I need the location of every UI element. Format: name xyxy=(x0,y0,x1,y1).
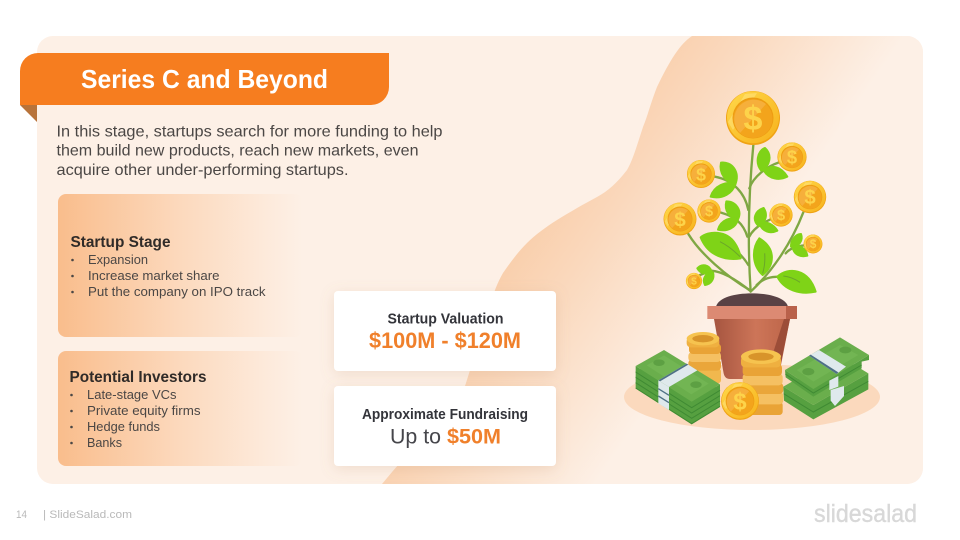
card: startup valuation xyxy=(334,291,556,371)
footer: brand logo: slidesalad xyxy=(814,500,917,528)
heading: potential investors: Potential Investors xyxy=(70,369,207,386)
left coin stack xyxy=(687,332,721,383)
pot rim xyxy=(707,306,797,319)
ground shadow xyxy=(624,364,880,430)
label: startup valuation: Startup Valuation xyxy=(388,312,504,328)
value: fundraising amount: Up to xyxy=(390,424,441,448)
intro paragraph: them build new products, reach new markets, even xyxy=(56,142,418,160)
footer: page number and site: | SlideSalad.com xyxy=(43,509,132,521)
list: potential investors: Private equity firms xyxy=(87,404,200,418)
coins on plant: $ xyxy=(787,146,797,167)
coins on plant: $ xyxy=(810,237,817,251)
title: Series C and Beyond xyxy=(81,64,328,94)
list: startup stage xyxy=(71,253,266,299)
pot, money and coin stacks xyxy=(636,293,869,424)
background blob xyxy=(382,36,923,484)
soil xyxy=(716,293,788,307)
label: approximate fundraising: Approximate Fundraising xyxy=(362,407,528,423)
title ribbon xyxy=(20,53,389,122)
front coin xyxy=(721,382,759,420)
footer: page number and site: 14 xyxy=(16,509,27,521)
list: potential investors xyxy=(70,388,200,450)
coins on plant: $ xyxy=(674,208,686,231)
left money stack xyxy=(636,350,720,424)
ribbon fold xyxy=(20,105,37,122)
right money stack xyxy=(783,337,869,419)
list: startup stage: Put the company on IPO track xyxy=(88,285,266,299)
intro paragraph: In this stage, startups search for more funding to help xyxy=(56,124,443,140)
ribbon bar xyxy=(20,53,389,105)
heading: startup stage: Startup Stage xyxy=(70,234,171,251)
front coin: $ xyxy=(733,388,747,415)
list: startup stage: Increase market share xyxy=(88,269,220,283)
value: fundraising amount: $50M xyxy=(447,424,501,448)
panel: potential investors xyxy=(58,351,303,466)
value: valuation range: $100M - $120M xyxy=(369,328,521,353)
coins on plant: $ xyxy=(744,100,763,138)
coins on plant: $ xyxy=(777,208,785,224)
coins on plant: $ xyxy=(696,164,706,184)
list: potential investors: Banks xyxy=(87,436,122,450)
intro paragraph xyxy=(56,124,443,179)
pot body xyxy=(714,319,790,379)
list: potential investors: Hedge funds xyxy=(87,420,160,434)
coins on plant: $ xyxy=(705,204,713,220)
coins on plant: $ xyxy=(691,277,697,288)
intro paragraph: acquire other under-performing startups. xyxy=(56,162,348,179)
list: startup stage: Expansion xyxy=(88,253,148,267)
plant stems and leaves xyxy=(688,145,816,293)
value: fundraising amount xyxy=(390,424,501,448)
list: potential investors: Late-stage VCs xyxy=(87,388,176,402)
panel: background xyxy=(37,36,923,484)
coins on plant xyxy=(664,91,826,289)
coins on plant: $ xyxy=(804,187,816,209)
card: approximate fundraising xyxy=(334,386,556,466)
right coin stack xyxy=(741,349,783,415)
panel: startup stage xyxy=(58,194,303,337)
illustration: money plant xyxy=(624,91,880,430)
